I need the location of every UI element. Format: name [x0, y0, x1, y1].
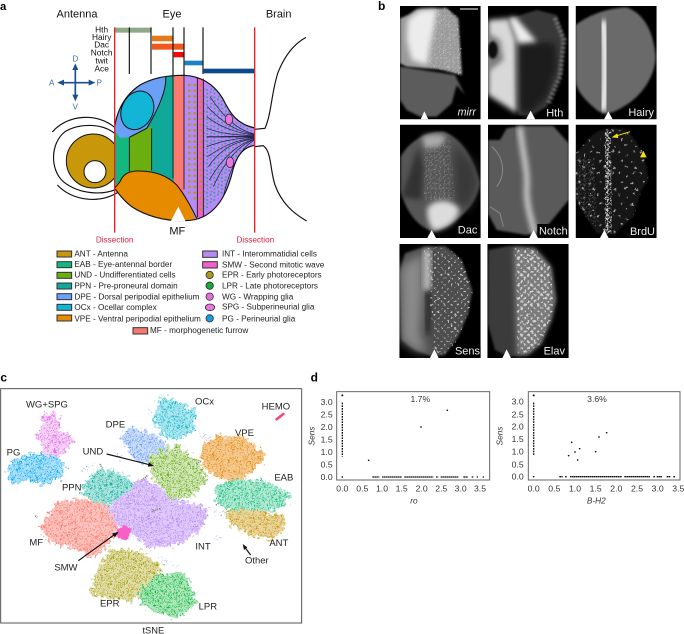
right legend column: LPR - Late photoreceptors	[222, 281, 318, 290]
cluster labels: WG+SPG	[26, 399, 68, 410]
plot: Sens vs B-H2: 0.0	[512, 472, 524, 482]
cluster labels: MF	[29, 537, 43, 548]
plot: Sens vs ro: 1.0	[376, 483, 388, 493]
panel c: tSNE scatter	[0, 370, 302, 634]
plot: Sens vs ro: 0.0	[321, 472, 333, 482]
compass arrows: V	[73, 103, 79, 112]
plot: Sens vs ro: 1.5	[396, 483, 408, 493]
region headings: Antenna	[57, 8, 98, 20]
dissection lines	[115, 27, 255, 233]
panel letter c: c	[0, 370, 7, 384]
left legend column: EAB - Eye-antennal border	[74, 260, 172, 269]
cluster labels: SMW	[54, 563, 78, 574]
MF legend entry: MF - morphogenetic furrow	[150, 326, 248, 335]
plot: Sens vs B-H2	[494, 392, 684, 505]
gene labels: twit	[95, 55, 109, 65]
plot: Sens vs B-H2: 3.6%	[587, 394, 607, 404]
left legend column: ANT - Antenna	[74, 249, 128, 258]
plot: Sens vs ro: ro	[410, 495, 418, 505]
eye disc	[113, 73, 257, 223]
image: BrdU	[576, 125, 657, 238]
gene labels: Hth	[95, 24, 109, 34]
gene expression bars	[115, 27, 254, 76]
plot: Sens vs ro: 3.0	[321, 397, 333, 407]
plot: Sens vs B-H2: 0.0	[528, 483, 540, 493]
plot: Sens vs ro: 2.5	[435, 483, 448, 493]
plot: Sens vs ro: 1.5	[321, 434, 333, 444]
image: Elav	[487, 244, 569, 358]
right legend column: PG - Perineurial glia	[222, 314, 296, 323]
left legend column: OCx - Ocellar complex	[74, 303, 157, 312]
image: Hairy	[576, 6, 657, 119]
panel letter d: d	[311, 370, 318, 384]
dissection labels	[96, 236, 274, 245]
dissection labels: Dissection	[237, 236, 274, 245]
plot: Sens vs B-H2: 3.5	[672, 483, 684, 493]
cluster labels: PG	[7, 448, 20, 459]
image: Notch: Notch	[539, 226, 568, 238]
cluster labels: EPR	[100, 599, 120, 610]
plot: Sens vs ro: 1.7%	[410, 394, 430, 404]
panel a: eye-antennal disc schematic	[0, 1, 307, 245]
plot: Sens vs ro: 2.0	[321, 422, 333, 432]
right legend column: SMW - Second mitotic wave	[222, 260, 325, 269]
panel b: microscopy images	[378, 0, 657, 358]
right legend column	[203, 250, 325, 323]
plot: Sens vs ro	[307, 392, 490, 505]
plot: Sens vs ro: 2.5	[321, 410, 333, 420]
compass arrows: A	[49, 79, 55, 88]
plot: Sens vs B-H2: 2.5	[512, 409, 524, 419]
plot: Sens vs B-H2: 1.0	[569, 483, 581, 493]
plot: Sens vs ro: 2.0	[416, 483, 428, 493]
left legend column: PPN - Pre-proneural domain	[74, 282, 178, 291]
left legend column	[57, 249, 201, 323]
cluster labels: Other	[245, 555, 269, 566]
gene labels: Notch	[91, 48, 113, 58]
left legend column: VPE - Ventral peripodial epithelium	[74, 314, 201, 323]
left legend column: DPE - Dorsal peripodial epithelium	[74, 292, 200, 301]
image: Dac: Dac	[458, 224, 478, 236]
image: mirr: mirr	[458, 106, 476, 118]
plot: Sens vs B-H2: 3.0	[652, 483, 664, 493]
tSNE frame	[1, 389, 302, 623]
clusters	[13, 402, 285, 613]
plot: Sens vs ro: 3.5	[474, 483, 486, 493]
right legend column: SPG - Subperineurial glia	[222, 302, 315, 311]
panel d: scatter plots	[307, 370, 684, 505]
image: Sens	[399, 244, 481, 358]
gene labels: Ace	[94, 64, 109, 74]
plot: Sens vs B-H2: 1.5	[512, 434, 524, 444]
plot: Sens vs B-H2: B-H2	[587, 495, 606, 505]
plot: Sens vs ro: 3.0	[455, 483, 467, 493]
image: Elav: Elav	[544, 345, 565, 357]
plot: Sens vs B-H2: 2.5	[631, 483, 643, 493]
image: Hth: Hth	[546, 108, 563, 120]
right legend column: WG - Wrapping glia	[222, 292, 294, 301]
cluster labels: EAB	[274, 473, 293, 484]
region headings: Brain	[266, 8, 291, 20]
cluster labels: ANT	[269, 538, 289, 549]
cluster labels: DPE	[106, 420, 125, 431]
plot: Sens vs ro: 1.0	[321, 447, 333, 457]
right legend column: INT - Interommatidial cells	[222, 250, 317, 259]
morphogenetic furrow marker	[171, 207, 186, 221]
right legend column: EPR - Early photoreceptors	[222, 271, 322, 280]
plot: Sens vs B-H2: 0.5	[512, 459, 524, 469]
region headings	[57, 8, 291, 20]
plot: Sens vs B-H2: 3.0	[512, 397, 524, 407]
plot: Sens vs B-H2: Sens	[494, 427, 504, 445]
region headings: Eye	[163, 8, 181, 20]
image: Dac	[400, 125, 481, 238]
gene labels	[91, 24, 113, 74]
image: Notch	[488, 125, 569, 238]
cluster labels: UND	[83, 446, 103, 457]
image: Hth	[488, 6, 569, 120]
legend for panel a	[57, 249, 325, 335]
compass arrows	[49, 54, 102, 112]
plot: Sens vs B-H2: 1.5	[590, 483, 602, 493]
plot: Sens vs B-H2: 0.5	[548, 483, 561, 493]
SMW and HEMO clusters	[35, 414, 283, 541]
plot: Sens vs ro: Sens	[307, 427, 317, 445]
plot: Sens vs ro: 0.5	[356, 483, 369, 493]
antenna	[52, 117, 120, 199]
image: Hairy: Hairy	[628, 107, 654, 119]
compass arrows: P	[97, 79, 102, 88]
image: BrdU: BrdU	[630, 226, 655, 238]
cluster labels: OCx	[195, 396, 214, 407]
image: Sens: Sens	[455, 345, 480, 357]
left legend column: UND - Undifferentiated cells	[74, 271, 176, 280]
plot: Sens vs B-H2: 1.0	[512, 447, 524, 457]
gene labels: Dac	[94, 40, 109, 50]
plot: Sens vs B-H2: 2.0	[512, 422, 524, 432]
gene labels: Hairy	[92, 32, 112, 42]
plot: Sens vs B-H2: 2.0	[610, 483, 623, 493]
cluster labels: PPN	[62, 483, 82, 494]
cluster labels: VPE	[235, 428, 254, 439]
panel letter a: a	[0, 1, 7, 13]
brain outline	[255, 37, 307, 221]
cluster labels	[7, 396, 293, 612]
compass arrows: D	[72, 54, 78, 63]
dissection labels: Dissection	[96, 236, 133, 245]
arrows	[78, 454, 251, 561]
plot: Sens vs ro: 0.0	[336, 483, 349, 493]
image: mirr	[400, 6, 481, 119]
cluster labels: LPR	[199, 601, 217, 612]
MF label: MF	[169, 225, 186, 237]
cluster labels: HEMO	[262, 401, 290, 412]
plot: Sens vs ro: 0.5	[321, 460, 333, 470]
cluster labels: INT	[195, 541, 211, 552]
